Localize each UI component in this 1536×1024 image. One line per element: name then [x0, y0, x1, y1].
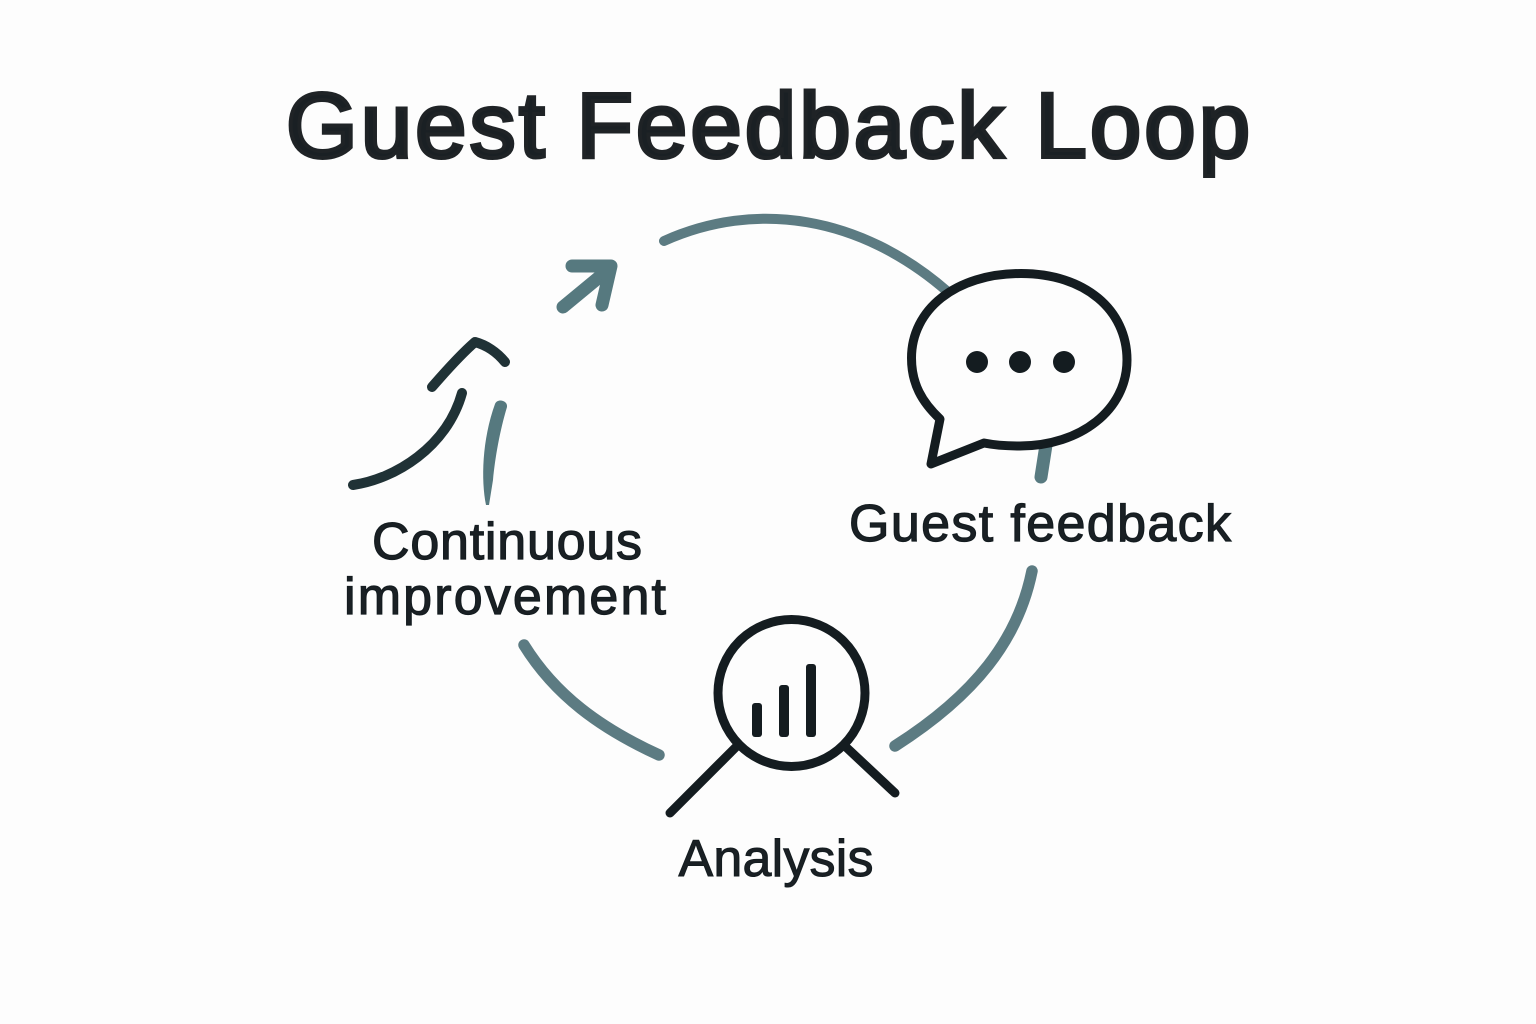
label: continuous improvement — [344, 513, 667, 626]
arc: top arc to feedback — [664, 219, 948, 292]
arrow: teal arrow — [563, 266, 611, 307]
arc: improvement upward — [483, 400, 507, 505]
label: continuous improvement: Continuous — [372, 513, 642, 571]
arc: feedback stub — [1041, 445, 1046, 477]
arrow: dark improvement arrow — [353, 342, 505, 485]
label: guest feedback: Guest feedback — [849, 495, 1232, 553]
label: analysis: Analysis — [678, 830, 874, 888]
icon: speech bubble — [912, 274, 1127, 464]
arc: feedback to analysis — [895, 571, 1032, 746]
title: Guest Feedback Loop — [286, 75, 1250, 177]
label: continuous improvement: improvement — [344, 568, 667, 626]
arc: analysis to improvement — [524, 645, 659, 755]
icon: magnifier with bars — [670, 620, 895, 813]
